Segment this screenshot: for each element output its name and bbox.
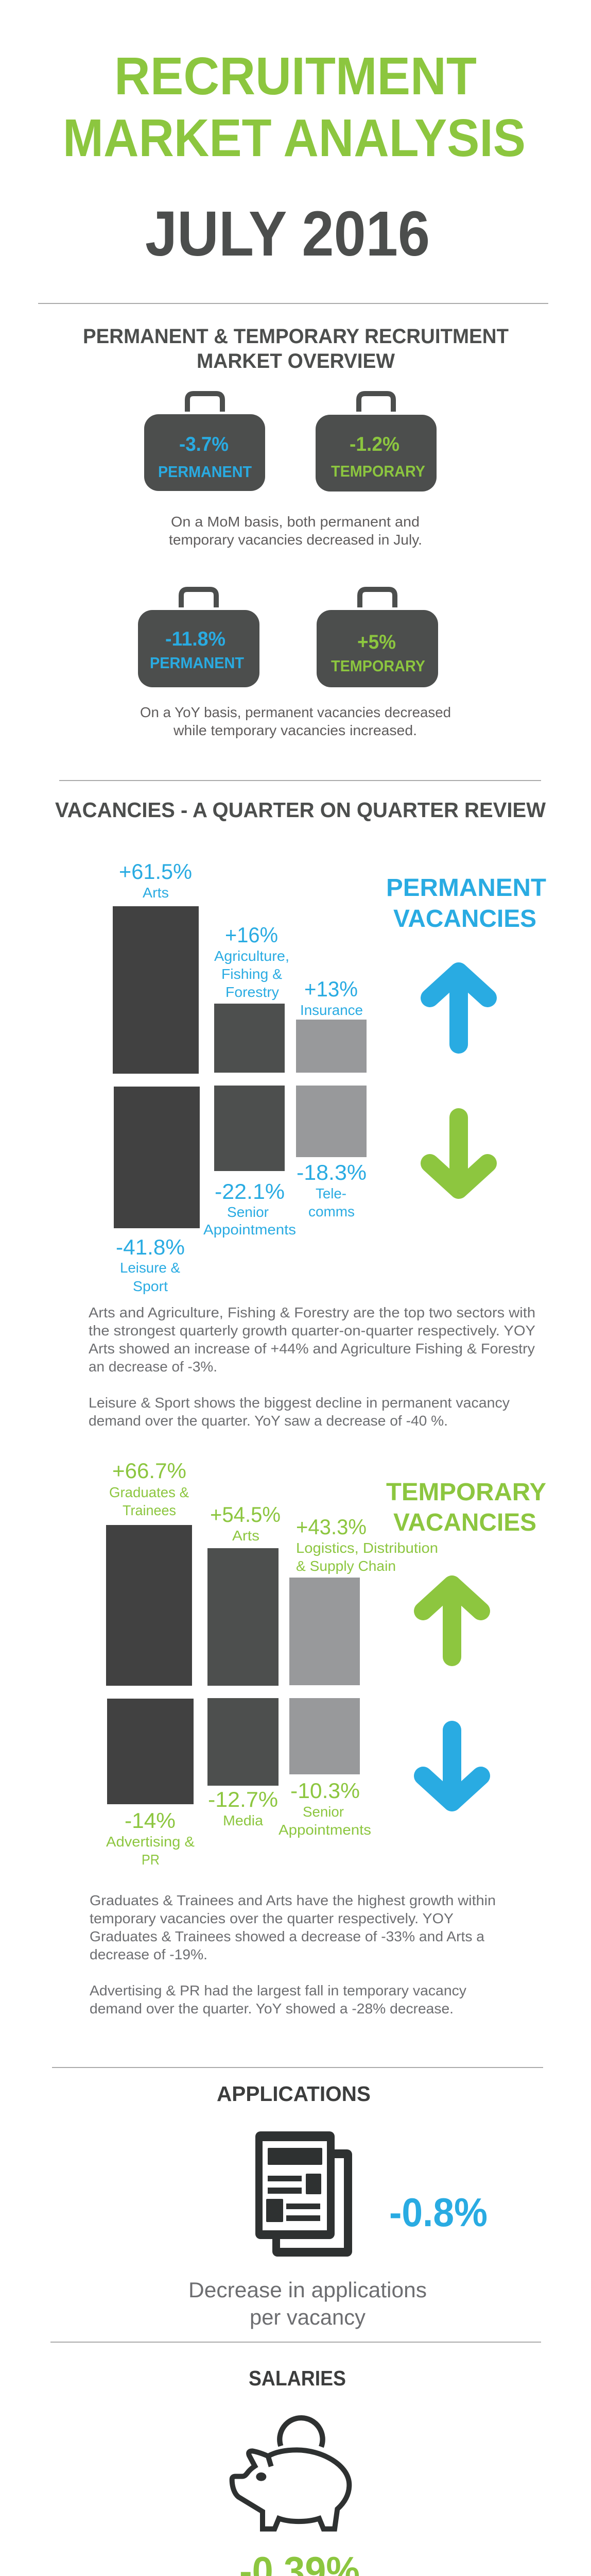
bar chart: permanent fallers: -41.8% — [116, 1235, 185, 1259]
bar chart: temporary fallers: Senior — [303, 1804, 344, 1820]
heading: permanent vacancies: PERMANENT — [386, 874, 546, 902]
bar chart: permanent risers: +13% — [304, 977, 358, 1001]
arrow: up green — [423, 1585, 481, 1657]
briefcase: YoY temporary: TEMPORARY — [331, 657, 425, 675]
heading: temporary vacancies: VACANCIES — [393, 1509, 536, 1536]
text: MoM summary: On a MoM basis, both permanent and — [171, 514, 420, 530]
briefcase: MoM temporary: -1.2% — [350, 433, 399, 455]
bar chart: permanent risers: +61.5% — [119, 859, 192, 884]
arrow: down green — [430, 1117, 488, 1190]
briefcase: MoM permanent — [144, 394, 265, 491]
text: applications caption: per vacancy — [250, 2305, 366, 2329]
text: temporary commentary: Graduates & Trainees showed a decrease of -33% and Arts a — [90, 1928, 484, 1944]
text: YoY summary: while temporary vacancies increased. — [173, 722, 417, 738]
bar chart: permanent fallers: Senior — [227, 1204, 269, 1220]
heading: market overview: MARKET OVERVIEW — [197, 350, 395, 372]
text: permanent commentary: Arts showed an increase of +44% and Agriculture Fishing & Forestry — [89, 1341, 535, 1357]
bar chart: temporary risers: +54.5% — [210, 1502, 281, 1527]
heading: permanent vacancies — [386, 874, 546, 933]
bar chart: permanent fallers: -18.3% — [297, 1160, 367, 1184]
text: permanent commentary: an decrease of -3%. — [89, 1359, 217, 1375]
bar chart: permanent fallers: Tele- — [316, 1185, 346, 1201]
heading: temporary vacancies — [386, 1479, 546, 1536]
bar chart: permanent risers: Arts — [143, 885, 169, 901]
bar chart: temporary risers: Trainees — [123, 1502, 176, 1518]
bar chart: temporary fallers — [106, 1698, 371, 1868]
heading: market overview: PERMANENT & TEMPORARY RECRUITMENT — [83, 325, 509, 348]
bar chart: temporary risers: Graduates & — [109, 1484, 189, 1500]
bar chart: temporary risers: Logistics, Distribution — [296, 1540, 438, 1556]
panel: market overview — [83, 325, 509, 738]
heading: permanent vacancies: VACANCIES — [393, 905, 536, 933]
title — [63, 46, 526, 167]
heading: vacancies review: VACANCIES - A QUARTER ON QUARTER REVIEW — [55, 798, 546, 822]
briefcase: MoM permanent: -3.7% — [179, 433, 229, 455]
text: permanent commentary: Leisure & Sport shows the biggest decline in permanent vacancy — [89, 1395, 510, 1411]
text: permanent commentary: demand over the quarter. YoY saw a decrease of -40 %. — [89, 1413, 448, 1429]
arrow: up blue — [430, 972, 488, 1044]
stat: applications change: -0.8% — [389, 2190, 488, 2235]
bar chart: temporary fallers: -12.7% — [208, 1787, 278, 1811]
bar chart: temporary fallers: PR — [142, 1852, 160, 1868]
arrow: down blue — [423, 1730, 481, 1802]
bar chart: temporary fallers: Media — [223, 1812, 263, 1828]
text: temporary commentary: temporary vacancies over the quarter respectively. YOY — [90, 1910, 454, 1926]
bar chart: permanent risers — [113, 859, 367, 1074]
bar chart: temporary risers: +43.3% — [296, 1515, 367, 1539]
text: permanent commentary: the strongest quarterly growth quarter-on-quarter respectively. YOY — [89, 1323, 535, 1338]
bar chart: permanent risers: Agriculture, — [214, 948, 289, 964]
text: YoY summary: On a YoY basis, permanent vacancies decreased — [140, 704, 451, 720]
bar chart: temporary fallers: -10.3% — [290, 1778, 360, 1803]
text: applications caption — [188, 2278, 427, 2329]
text: applications caption: Decrease in applications — [188, 2278, 427, 2302]
text: temporary commentary: demand over the quarter. YoY showed a -28% decrease. — [90, 2001, 454, 2016]
bar chart: permanent risers: Fishing & — [221, 966, 282, 982]
text: temporary commentary: Graduates & Trainees and Arts have the highest growth within — [90, 1892, 496, 1908]
text: YoY summary — [140, 704, 451, 738]
briefcase: YoY temporary — [317, 589, 438, 687]
panel: permanent vacancies — [89, 859, 546, 1429]
bar chart: permanent fallers: Sport — [133, 1278, 168, 1294]
heading: market overview — [83, 325, 509, 372]
bar chart: temporary risers — [106, 1459, 438, 1686]
icon: newspaper — [255, 2131, 352, 2257]
text: temporary commentary: decrease of -19%. — [90, 1946, 207, 1962]
text: permanent commentary: Arts and Agriculture, Fishing & Forestry are the top two sectors with — [89, 1304, 535, 1320]
briefcase: YoY permanent: PERMANENT — [150, 654, 244, 672]
title: MARKET ANALYSIS — [63, 108, 526, 167]
briefcase: YoY temporary: +5% — [357, 631, 396, 653]
bar chart: permanent fallers: -22.1% — [215, 1179, 285, 1204]
panel: applications — [188, 2082, 488, 2329]
bar chart: temporary risers: & Supply Chain — [296, 1558, 396, 1574]
bar chart: temporary fallers: Advertising & — [106, 1834, 195, 1850]
briefcase: YoY permanent: -11.8% — [165, 628, 225, 650]
text: MoM summary — [169, 514, 422, 548]
bar chart: temporary fallers: Appointments — [279, 1822, 371, 1838]
bar chart: permanent fallers: Leisure & — [120, 1260, 180, 1276]
heading: salaries: SALARIES — [249, 2366, 346, 2390]
bar chart: temporary fallers: -14% — [125, 1808, 176, 1833]
bar chart: temporary risers: Arts — [232, 1528, 259, 1544]
heading: temporary vacancies: TEMPORARY — [386, 1479, 546, 1506]
text: MoM summary: temporary vacancies decreased in July. — [169, 532, 422, 548]
title: RECRUITMENT — [114, 46, 477, 106]
icon: piggy bank — [232, 2418, 349, 2529]
briefcase: MoM permanent: PERMANENT — [158, 463, 252, 481]
briefcase: YoY permanent — [138, 589, 259, 687]
date heading: JULY 2016 — [145, 199, 430, 269]
bar chart: permanent fallers: Appointments — [203, 1222, 296, 1238]
text: temporary commentary — [90, 1892, 496, 2016]
heading: applications: APPLICATIONS — [217, 2082, 371, 2106]
panel: temporary vacancies — [90, 1459, 546, 2016]
bar chart: permanent fallers: comms — [308, 1204, 355, 1219]
bar chart: permanent risers: +16% — [225, 923, 278, 947]
bar chart: temporary risers: +66.7% — [112, 1459, 186, 1483]
bar chart: permanent risers: Forestry — [225, 984, 279, 1000]
briefcase: MoM temporary: TEMPORARY — [331, 462, 425, 480]
briefcase: MoM temporary — [316, 394, 437, 492]
text: temporary commentary: Advertising & PR had the largest fall in temporary vacancy — [90, 1982, 466, 1998]
panel: salaries — [102, 2366, 507, 2576]
bar chart: permanent fallers — [114, 1086, 367, 1294]
text: permanent commentary — [89, 1304, 535, 1429]
bar chart: permanent risers: Insurance — [300, 1002, 363, 1018]
